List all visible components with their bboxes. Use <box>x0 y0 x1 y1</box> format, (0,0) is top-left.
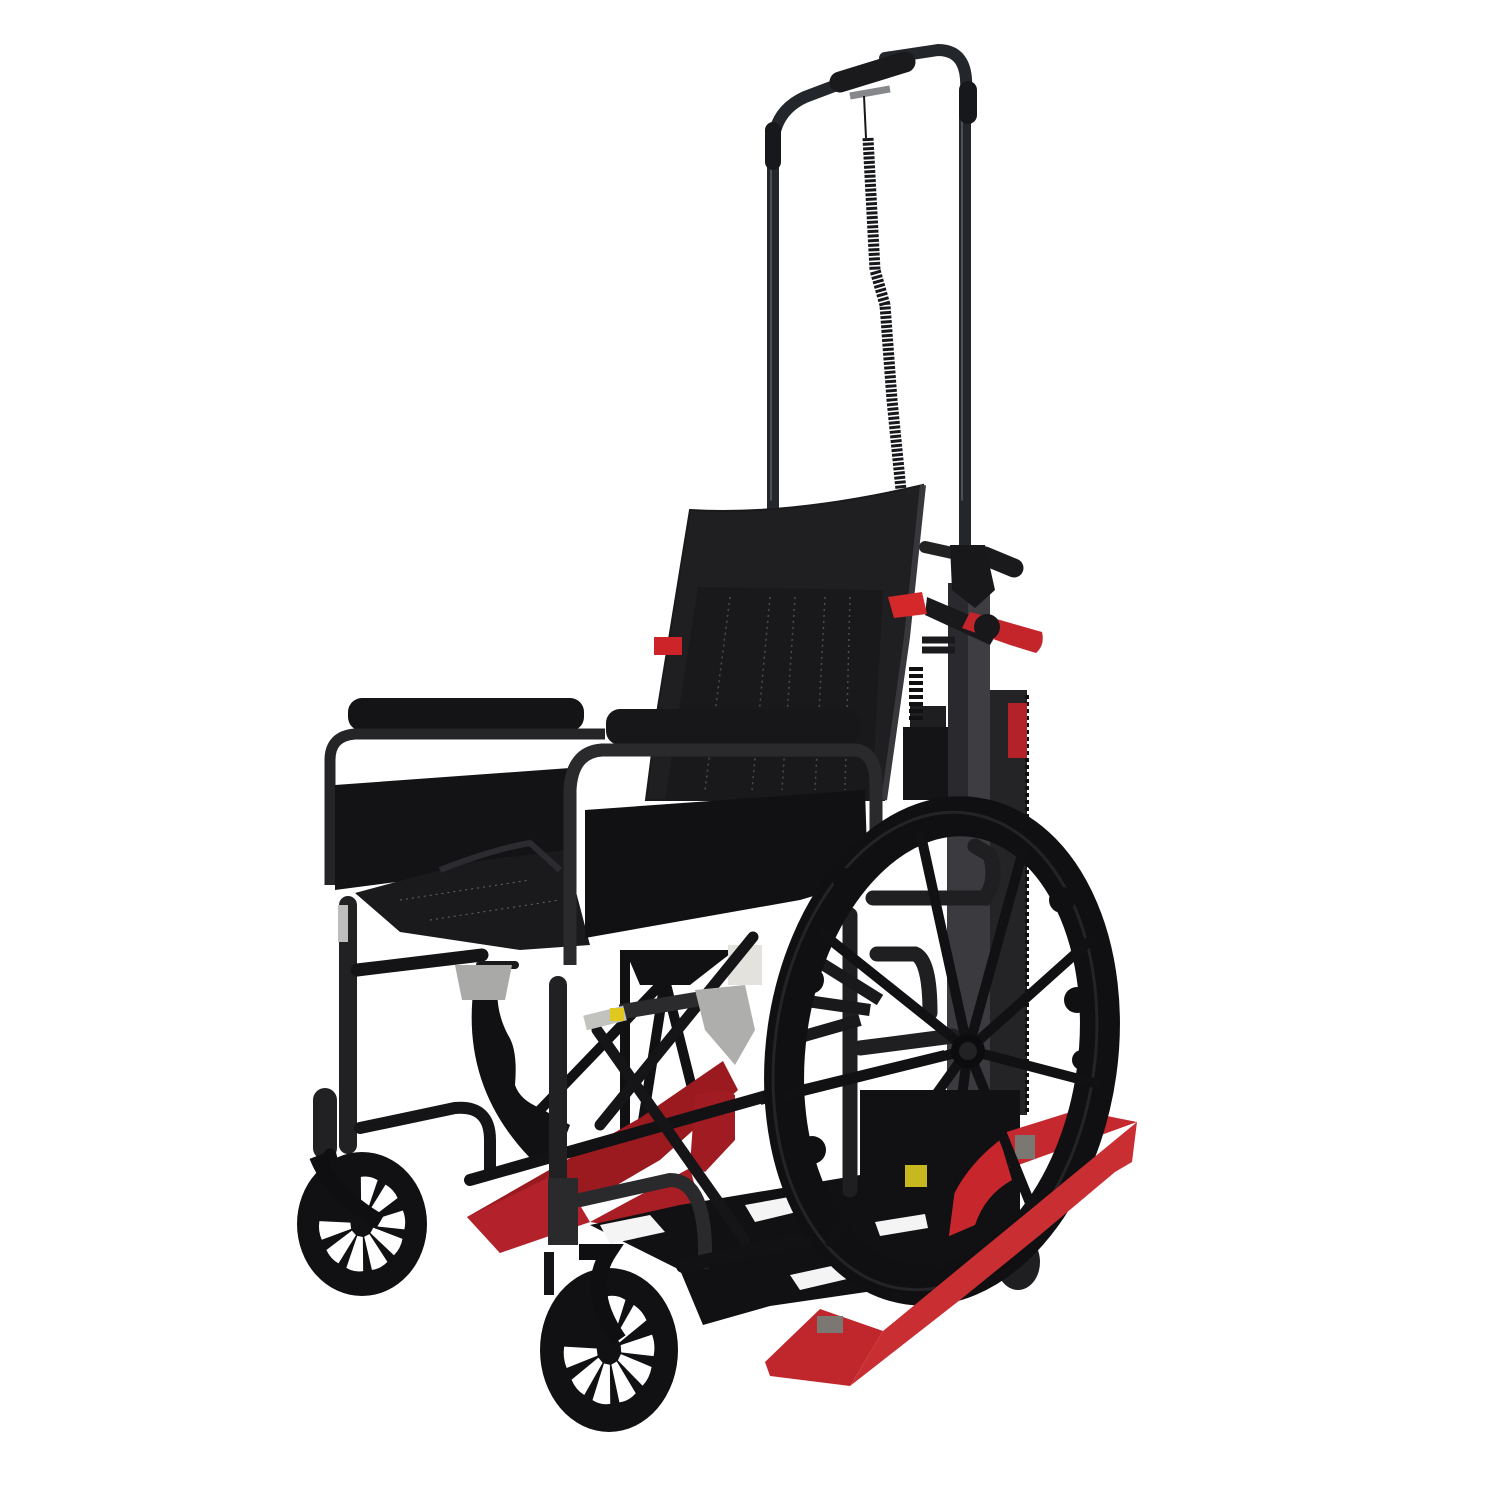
small rear caster <box>297 1152 427 1296</box>
climber base and cross tubes <box>590 846 1040 1325</box>
coiled cable <box>864 96 901 490</box>
far rim of front ramp and curved fin <box>940 1110 1137 1240</box>
red backrest clamps <box>654 592 1043 655</box>
big rear wheel <box>743 791 1129 1311</box>
seat <box>355 843 590 950</box>
climber column and drive <box>903 545 1027 1150</box>
near armrest and side panel <box>570 709 876 965</box>
pale bracket behind seat <box>728 945 762 985</box>
far armrest and side panel <box>330 698 605 890</box>
wheelchair backrest <box>646 485 923 800</box>
small front caster <box>540 1252 678 1432</box>
wheelchair lower frame <box>325 905 800 1266</box>
handle frame of stair climber <box>771 50 968 560</box>
red front ramp <box>765 1122 1137 1386</box>
rear red ramps <box>467 1061 738 1253</box>
far wheel of wheelchair <box>472 950 735 1165</box>
